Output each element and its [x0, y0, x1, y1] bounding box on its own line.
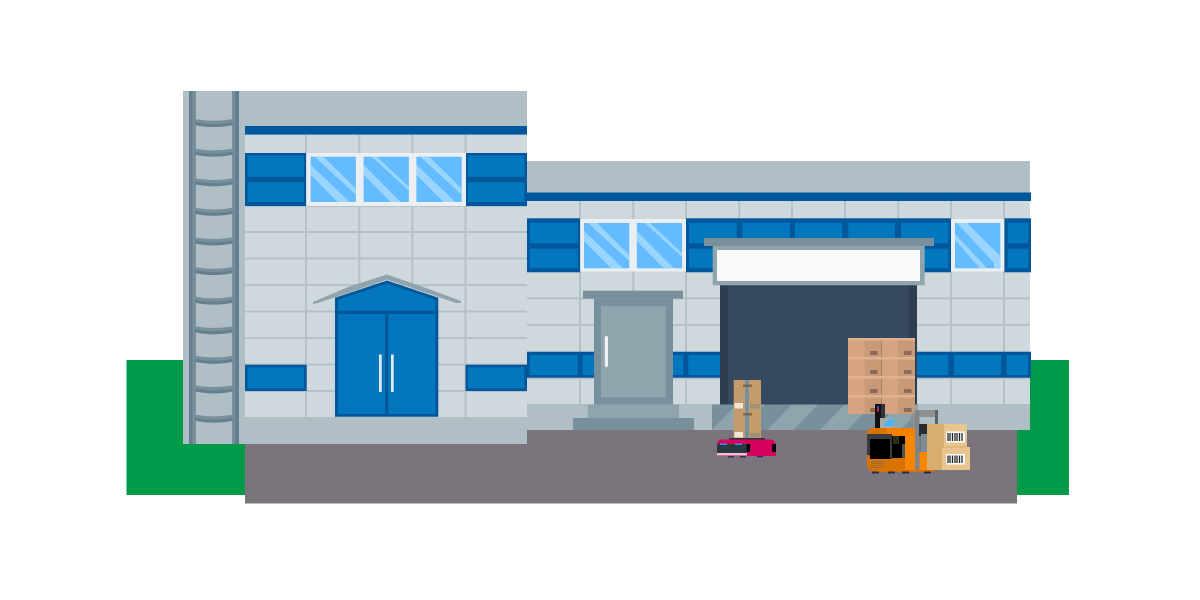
entrance double door	[335, 280, 438, 417]
left wall	[245, 135, 527, 417]
forklift mast	[910, 410, 938, 470]
loading ramp	[712, 404, 918, 430]
lower blue panel right	[466, 365, 527, 391]
operator pole and light	[875, 404, 885, 429]
left blue band	[245, 126, 527, 135]
driveway	[245, 430, 1017, 504]
upper blue panels	[527, 218, 1031, 272]
lower blue band	[527, 352, 1031, 378]
robot body	[717, 438, 776, 458]
barcode lower	[946, 454, 965, 464]
forklift wheels	[872, 472, 931, 474]
sign board	[704, 238, 934, 285]
roller shutter opening	[720, 285, 917, 404]
entrance canopy	[313, 274, 461, 304]
forklift cab	[867, 434, 905, 468]
right wall grid	[527, 201, 1030, 404]
side door	[583, 291, 683, 405]
left base plinth	[245, 417, 527, 444]
forklift body	[867, 428, 934, 472]
lower blue panel left	[245, 365, 307, 391]
upper blue panels right	[466, 153, 527, 206]
stacked cartons on pallet	[848, 338, 915, 414]
right blue band	[527, 192, 1031, 201]
right building	[527, 161, 1031, 430]
single window	[951, 219, 1004, 272]
right roof fascia	[527, 161, 1030, 192]
left wall grid	[245, 135, 527, 417]
forklift cartons	[927, 424, 970, 470]
left roof fascia	[245, 91, 527, 126]
forklift with boxes	[867, 404, 970, 474]
robot with boxes	[717, 380, 776, 458]
left building	[245, 91, 527, 444]
upper blue panels left	[245, 153, 306, 206]
forklift rear section	[919, 424, 928, 470]
right wall	[527, 201, 1030, 404]
right base plinth	[527, 404, 1030, 430]
barcode upper	[946, 432, 965, 442]
ladder rungs	[195, 119, 233, 423]
lawn: left	[126, 360, 246, 495]
ladder rails	[189, 91, 239, 444]
forklift screen	[880, 418, 895, 428]
upper window	[306, 153, 466, 206]
door steps	[573, 405, 694, 430]
robot cartons	[734, 380, 761, 438]
double window	[580, 219, 686, 272]
silo tower with ladder	[183, 91, 245, 444]
lawn: right	[1017, 360, 1069, 495]
